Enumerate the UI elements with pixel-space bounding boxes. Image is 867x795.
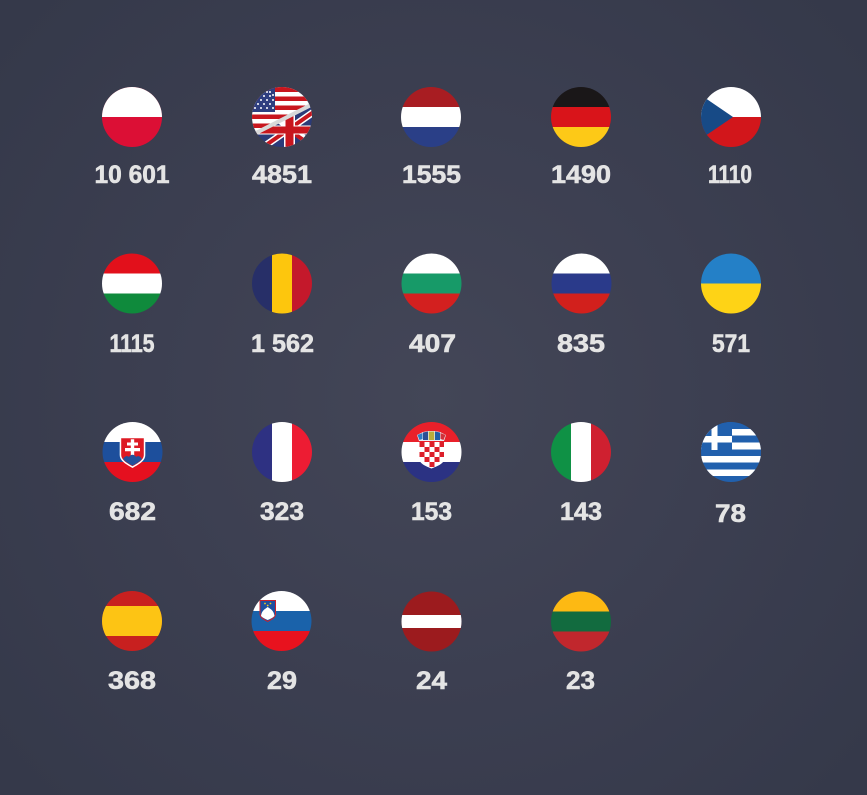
value: 1115: [110, 330, 155, 358]
value: 1555: [402, 161, 461, 189]
icon: flag of Latvia: [402, 592, 462, 652]
value: 682: [109, 498, 156, 526]
item: Slovakia 682: [102, 422, 162, 526]
icon: flag of Romania: [252, 254, 312, 314]
icon: flag of Russia: [552, 254, 612, 314]
item: USA and UK 4851: [252, 87, 312, 184]
icon: split flag of USA and UK: [252, 87, 312, 147]
icon: flag of Slovenia: [252, 591, 312, 651]
item: Latvia 24: [402, 592, 462, 695]
value: 835: [557, 330, 605, 358]
icon: flag of Spain: [102, 591, 162, 651]
value: 143: [560, 498, 602, 526]
value: 78: [715, 500, 746, 528]
item: Romania 1 562: [251, 254, 314, 358]
item: Bulgaria 407: [402, 254, 462, 358]
item: Spain 368: [102, 591, 162, 695]
icon: flag of Croatia: [402, 422, 462, 482]
value: 10 601: [94, 161, 170, 189]
item: Poland 10 601: [94, 87, 170, 189]
icon: flag of France: [252, 422, 312, 482]
item: Netherlands 1555: [401, 87, 461, 189]
value: 23: [566, 667, 595, 695]
value: 368: [108, 667, 156, 695]
item: Ukraine 571: [701, 254, 761, 358]
icon: flag of Greece: [701, 422, 761, 482]
value: 4851: [252, 161, 312, 189]
item: Germany 1490: [551, 87, 611, 189]
value: 407: [409, 330, 456, 358]
item: Italy 143: [551, 422, 611, 526]
value: 29: [267, 667, 297, 695]
item: Lithuania 23: [551, 592, 611, 695]
item: Czech Republic 1110: [701, 87, 761, 184]
icon: flag of Poland: [102, 87, 162, 147]
icon: flag of Lithuania: [551, 592, 611, 652]
value: 1490: [551, 161, 611, 189]
icon: flag of Ukraine: [701, 254, 761, 314]
icon: flag of the Czech Republic: [701, 87, 761, 147]
icon: flag of Slovakia: [102, 422, 162, 482]
icon: flag of Bulgaria: [402, 254, 462, 314]
value: 153: [411, 498, 452, 526]
item: Slovenia 29: [252, 591, 312, 695]
icon: flag of Hungary: [102, 254, 162, 314]
item: Hungary 1115: [102, 254, 162, 358]
value: 323: [260, 498, 304, 526]
item: Russia 835: [552, 254, 612, 358]
item: France 323: [252, 422, 312, 526]
icon: flag of Germany: [551, 87, 611, 147]
value: 1 562: [251, 330, 314, 358]
value: 571: [712, 330, 750, 358]
icon: flag of the Netherlands: [401, 87, 461, 147]
value: 1110: [708, 161, 752, 189]
item: Greece 78: [701, 422, 761, 528]
icon: flag of Italy: [551, 422, 611, 482]
item: Croatia 153: [402, 422, 462, 526]
value: 24: [416, 667, 447, 695]
